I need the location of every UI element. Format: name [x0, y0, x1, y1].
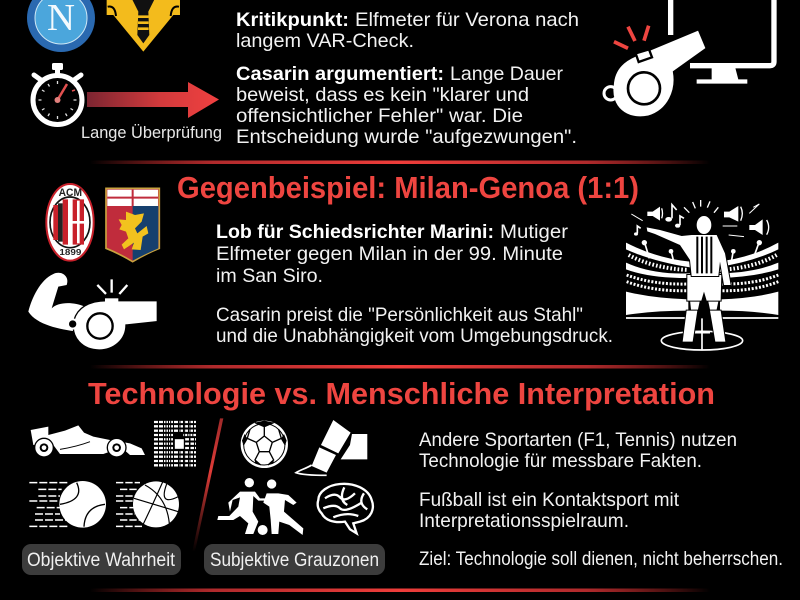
text block: Kritikpunkt: Elfmeter für Verona nach — [355, 9, 579, 31]
icon: soccer ball — [241, 421, 288, 468]
heading: Gegenbeispiel: Gegenbeispiel: Milan-Genoa (1:1) — [177, 170, 639, 205]
text block: Fußball: Interpretationsspielraum. — [419, 510, 629, 532]
label pill: Objektive Wahrheit — [22, 544, 181, 575]
heading: Technologie vs. Menschliche Interpretation: Technologie vs. Menschliche Interpretation — [88, 376, 715, 411]
text block: Lob für Marini — [216, 221, 569, 287]
text block: Kritikpunkt — [236, 9, 579, 52]
icon: whistle and monitor — [604, 0, 774, 117]
icon: Genoa badge — [106, 188, 159, 262]
icon: basketball with speed lines — [116, 481, 179, 527]
icon: F1 car — [31, 425, 145, 457]
divider — [90, 588, 710, 592]
label pill: Subjektive Grauzonen — [204, 544, 385, 575]
text block: Casarin argumentiert: Lange Dauer — [450, 63, 563, 85]
icon: whistle with rays — [68, 279, 157, 350]
text block: Persönlichkeit aus Stahl: und die Unabhängigkeit vom Umgebungsdruck. — [216, 325, 613, 347]
icon: stopwatch — [33, 63, 82, 124]
text block: Lob für Marini: Mutiger — [500, 221, 569, 243]
text block: Lob für Marini: im San Siro. — [216, 265, 323, 287]
divider — [90, 160, 710, 164]
text block: Persönlichkeit aus Stahl: Casarin preist die "Persönlichkeit aus Stahl" — [216, 304, 583, 326]
text block: Casarin argumentiert — [236, 63, 577, 148]
text block: Lob für Marini: Lob für Schiedsrichter Marini: — [216, 221, 494, 243]
icon: Napoli badge — [27, 0, 95, 52]
text block: Casarin argumentiert: beweist, dass es kein "klarer und — [236, 84, 529, 106]
text block: Lob für Marini: Elfmeter gegen Milan in der 99. Minute — [216, 243, 563, 265]
red slash divider — [192, 418, 223, 552]
icon: brain — [318, 484, 373, 533]
divider — [90, 365, 710, 368]
icon: AC Milan badge: ACM — [59, 187, 82, 199]
text block: Fußball — [419, 489, 680, 532]
arrow: long review — [87, 82, 219, 118]
text block: Andere Sportarten: Technologie für messbare Fakten. — [419, 450, 702, 472]
icon: referee in stadium — [626, 200, 778, 350]
label pill: Objektive Wahrheit: Objektive Wahrheit — [27, 550, 176, 571]
icon: leg and foot — [296, 420, 367, 475]
icon: Verona badge — [107, 0, 180, 52]
label pill: Subjektive Grauzonen: Subjektive Grauzonen — [210, 550, 379, 571]
text block: Andere Sportarten — [419, 429, 737, 472]
icon: two players with ball — [217, 478, 303, 535]
icon: AC Milan badge — [46, 184, 94, 261]
icon: microchip — [154, 421, 196, 468]
label: Lange Überprüfung: Lange Überprüfung — [81, 124, 222, 142]
icon: flexed arm — [28, 273, 85, 332]
text block: Casarin argumentiert: Casarin argumentiert: — [236, 63, 444, 85]
text block: Andere Sportarten: Andere Sportarten (F1, Tennis) nutzen — [419, 429, 737, 451]
icon: tennis ball with speed lines — [29, 481, 106, 528]
icon: AC Milan badge: 1899 — [59, 247, 82, 257]
text block: Fußball: Fußball ist ein Kontaktsport mit — [419, 489, 680, 511]
text block: Casarin argumentiert: Entscheidung wurde "aufgezwungen". — [236, 126, 577, 148]
text block: Kritikpunkt: langem VAR-Check. — [236, 30, 414, 52]
text block: Casarin argumentiert: offensichtlicher Fehler" war. Die — [236, 105, 523, 127]
text block: Persönlichkeit aus Stahl — [216, 304, 613, 347]
text block: Kritikpunkt: Kritikpunkt: — [236, 9, 349, 31]
